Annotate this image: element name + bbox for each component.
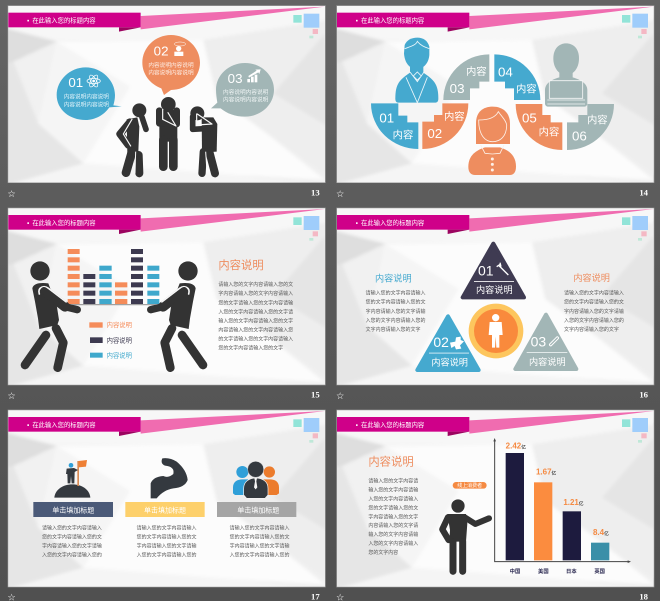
header title: ▪ [356,220,358,227]
text block: 内容请输入您的文字内容请输入您 [218,326,293,333]
text block [218,281,293,351]
left text block: 入您的文字内容请输入您的 [366,317,425,324]
column 1 text: 请输入您的文字内容请输入 [42,524,102,531]
column 2 text: 字内容请输入您的文字请输 [137,543,196,550]
right text block: 入您的文字内容请输入您的 [564,317,624,324]
icon: businessman [395,38,438,103]
column 2 text: 入您的文字内容请输入您的 [137,551,196,558]
figure: right thinking person [190,106,217,173]
header title: ▪ [356,18,358,25]
slide background [329,0,660,187]
segment 06 [567,104,614,150]
bar chart: 中国 [510,567,520,575]
bubble 03: 03 [228,71,242,86]
header title: ▪ [27,422,29,429]
column 1 text: 您的文字内容请输入您的文 [42,534,102,541]
page number star: ☆ [336,189,344,200]
header title: ▪ [27,220,29,227]
text block: 您的文字请输入您的文字内容请输 [218,299,293,306]
column 3 title bar [217,502,296,517]
text block: 请输入您的文字内容请输入您的文 [218,281,293,288]
column 1 title bar: 单击填加标题 [52,506,94,515]
icon: growth chart [247,69,261,82]
triangle 01 [463,244,524,297]
bubble 03: 内容说明内容说明 [223,96,269,104]
triangle 02: 内容说明 [431,357,468,368]
slide background [329,404,660,591]
panel: slide 15 equalizer chart [0,202,333,402]
page number: 16 [639,389,649,399]
icon: person with laptop [545,43,587,107]
icon: puzzle [450,337,464,349]
text block: 请输入您的文字内容请 [368,477,418,484]
text block: 输入您的文字内容请输 [368,487,418,494]
segment 04: 内容 [516,83,537,96]
figure: presenter [442,499,489,571]
text block: 入您的文字内容请输入您的文字请 [218,308,293,315]
segment 03: 03 [450,81,464,96]
panel: slide 13 speech bubbles [0,0,333,200]
column 3 text: 入您的文字内容请输入您的 [230,551,289,558]
segment 01 [371,103,418,149]
left text block: 字内容请输入您的文字请输 [366,308,425,315]
header title: 在此输入您的标题内容 [32,218,96,227]
text block [368,477,418,556]
bar chart: 英国 [594,567,605,575]
text block: 内容请输入您的文字请 [368,522,418,529]
column 3 text [230,524,289,558]
bubble 02: 内容说明内容说明 [148,69,194,77]
triangle 03: 03 [531,333,546,349]
text block: 入您的文字内容请输入 [368,540,418,547]
bar chart: 1.21亿 [563,498,584,507]
panel: slide 18 bar chart [329,404,660,601]
panel: slide 16 triangles [329,202,660,402]
text block: 输入您的文字内容请输入您的文字 [218,317,293,324]
column 1 title bar [33,502,113,517]
figure: right carrier [151,261,203,368]
heading: 内容说明 [218,258,264,272]
column 3 text: 字内容请输入您的文字请输 [230,543,289,550]
bubble 03: 内容说明内容说明 [223,88,269,96]
text block: 您的文字请输入您的文 [368,505,418,512]
text block: 入您的文字内容请输入 [368,496,418,503]
page number: 13 [311,187,320,197]
panel: slide 14 six segments [329,0,660,200]
column 2 text [137,524,196,558]
bubble 02 [142,35,200,95]
left text block: 内容说明 [375,273,412,284]
triangle 01: 01 [478,262,494,278]
page number star: ☆ [336,391,344,402]
column 2 title bar: 单击填加标题 [144,506,186,515]
column 2 text: 您的文字内容请输入您的文 [137,534,196,541]
icon: businesswoman [468,107,516,175]
segment 06: 06 [572,129,587,144]
bar chart [493,438,631,575]
bubble 01: 内容说明内容说明 [64,93,109,101]
column 3 title bar: 单击填加标题 [237,506,279,515]
column 2 title bar [125,502,205,517]
icon: person with flag on hill [54,460,90,498]
legend: 内容说明 [107,350,132,359]
right text block: 您的文字内容请输入您的文 [564,299,624,306]
bar chart: 日本 [566,567,577,575]
bar chart: 2.42亿 [506,442,526,451]
header title: 在此输入您的标题内容 [361,16,425,25]
icon: team [233,461,279,498]
page number: 14 [639,187,649,197]
column 3 text: 您的文字内容请输入您的文 [230,534,289,541]
page number star: ☆ [7,189,16,200]
text block: 字内容请输入您的文字 [368,514,418,521]
right text block: 请输入您的文字内容请输入 [564,289,624,296]
figure: left thinking person [120,103,146,173]
page number: 15 [311,389,320,399]
bar chart [67,249,161,305]
panel: slide 17 three columns [0,404,333,601]
segment 05: 05 [522,110,537,125]
triangle 03: 内容说明 [529,356,566,367]
text block: 您的文字内容请输入您的文字 [218,344,283,351]
triangle 01: 内容说明 [476,284,513,295]
bubble 02: 02 [154,43,168,58]
text block: 您的文字内容 [368,549,398,556]
icon: atom [87,74,100,88]
segment 02: 02 [427,126,442,141]
slide background [0,404,333,591]
text block: 的文字请输入您的文字内容请输入 [218,335,293,342]
slide background [329,202,660,389]
segment 01: 内容 [393,128,413,141]
column 1 text: 入您的文字内容请输入您的 [42,551,102,558]
header title: ▪ [27,18,29,25]
page number star: ☆ [7,391,16,402]
icon: wand [497,263,508,275]
column 1 text: 字内容请输入您的文字请输 [42,543,102,550]
header title: 在此输入您的标题内容 [361,420,425,429]
bar chart: 8.4亿 [593,528,609,537]
segment 03: 内容 [466,65,487,78]
callout pill: 线上消费者 [457,482,482,489]
icon: person with thought [174,42,186,56]
header title: 在此输入您的标题内容 [361,218,425,227]
segment 05: 内容 [539,125,559,138]
icon: chain link [551,338,557,345]
text block: 字内容请输入您的文字内容请输入 [218,290,293,297]
right text block: 文字内容请输入您的文字 [564,326,619,333]
right text block: 内容说明 [573,272,610,283]
icon: flexed arm [151,458,188,498]
bar chart: 美国 [538,567,549,575]
header title: 在此输入您的标题内容 [32,420,96,429]
legend [89,320,132,359]
bubble 01: 01 [68,75,83,90]
column 2 text: 请输入您的文字内容请输入 [137,524,196,531]
left text block [366,273,425,333]
segment 02: 内容 [444,110,465,123]
legend: 内容说明 [107,320,132,329]
left text block: 请输入您的文字内容请输入 [366,289,425,296]
figure: middle thinking person [159,97,177,167]
text block: 输入您的文字内容请输 [368,531,418,538]
left text block: 文字内容请输入您的文字 [366,326,421,333]
triangle 02 [417,316,479,370]
bubble 02: 内容说明内容说明 [148,61,194,69]
column 3 text: 请输入您的文字内容请输入 [230,524,289,531]
column 1 text [42,524,102,558]
right text block: 字内容请输入您的文字请输 [564,308,624,315]
segment 03 [443,54,489,100]
heading: 内容说明 [368,455,414,469]
segment 06: 内容 [587,113,608,126]
segment 04: 04 [498,65,513,80]
figure: left carrier [25,261,77,368]
callout pill [453,482,487,489]
segment 05 [516,104,562,150]
bubble 03 [211,63,274,117]
segment 04 [494,54,540,100]
bubble 01: 内容说明内容说明 [64,101,109,109]
triangle 02: 02 [433,334,449,350]
segment 01: 01 [379,110,394,125]
segment 02 [422,103,468,149]
left text block: 您的文字内容请输入您的文 [366,299,425,306]
bar chart: 1.67亿 [536,468,557,477]
header title: 在此输入您的标题内容 [32,16,96,25]
legend: 内容说明 [107,335,132,344]
triangle 03 [515,315,576,369]
bubble 01 [57,67,122,120]
slide background [0,0,333,187]
slide background [0,202,333,389]
right text block [564,272,624,333]
center person badge [469,304,523,358]
header title: ▪ [356,422,358,429]
